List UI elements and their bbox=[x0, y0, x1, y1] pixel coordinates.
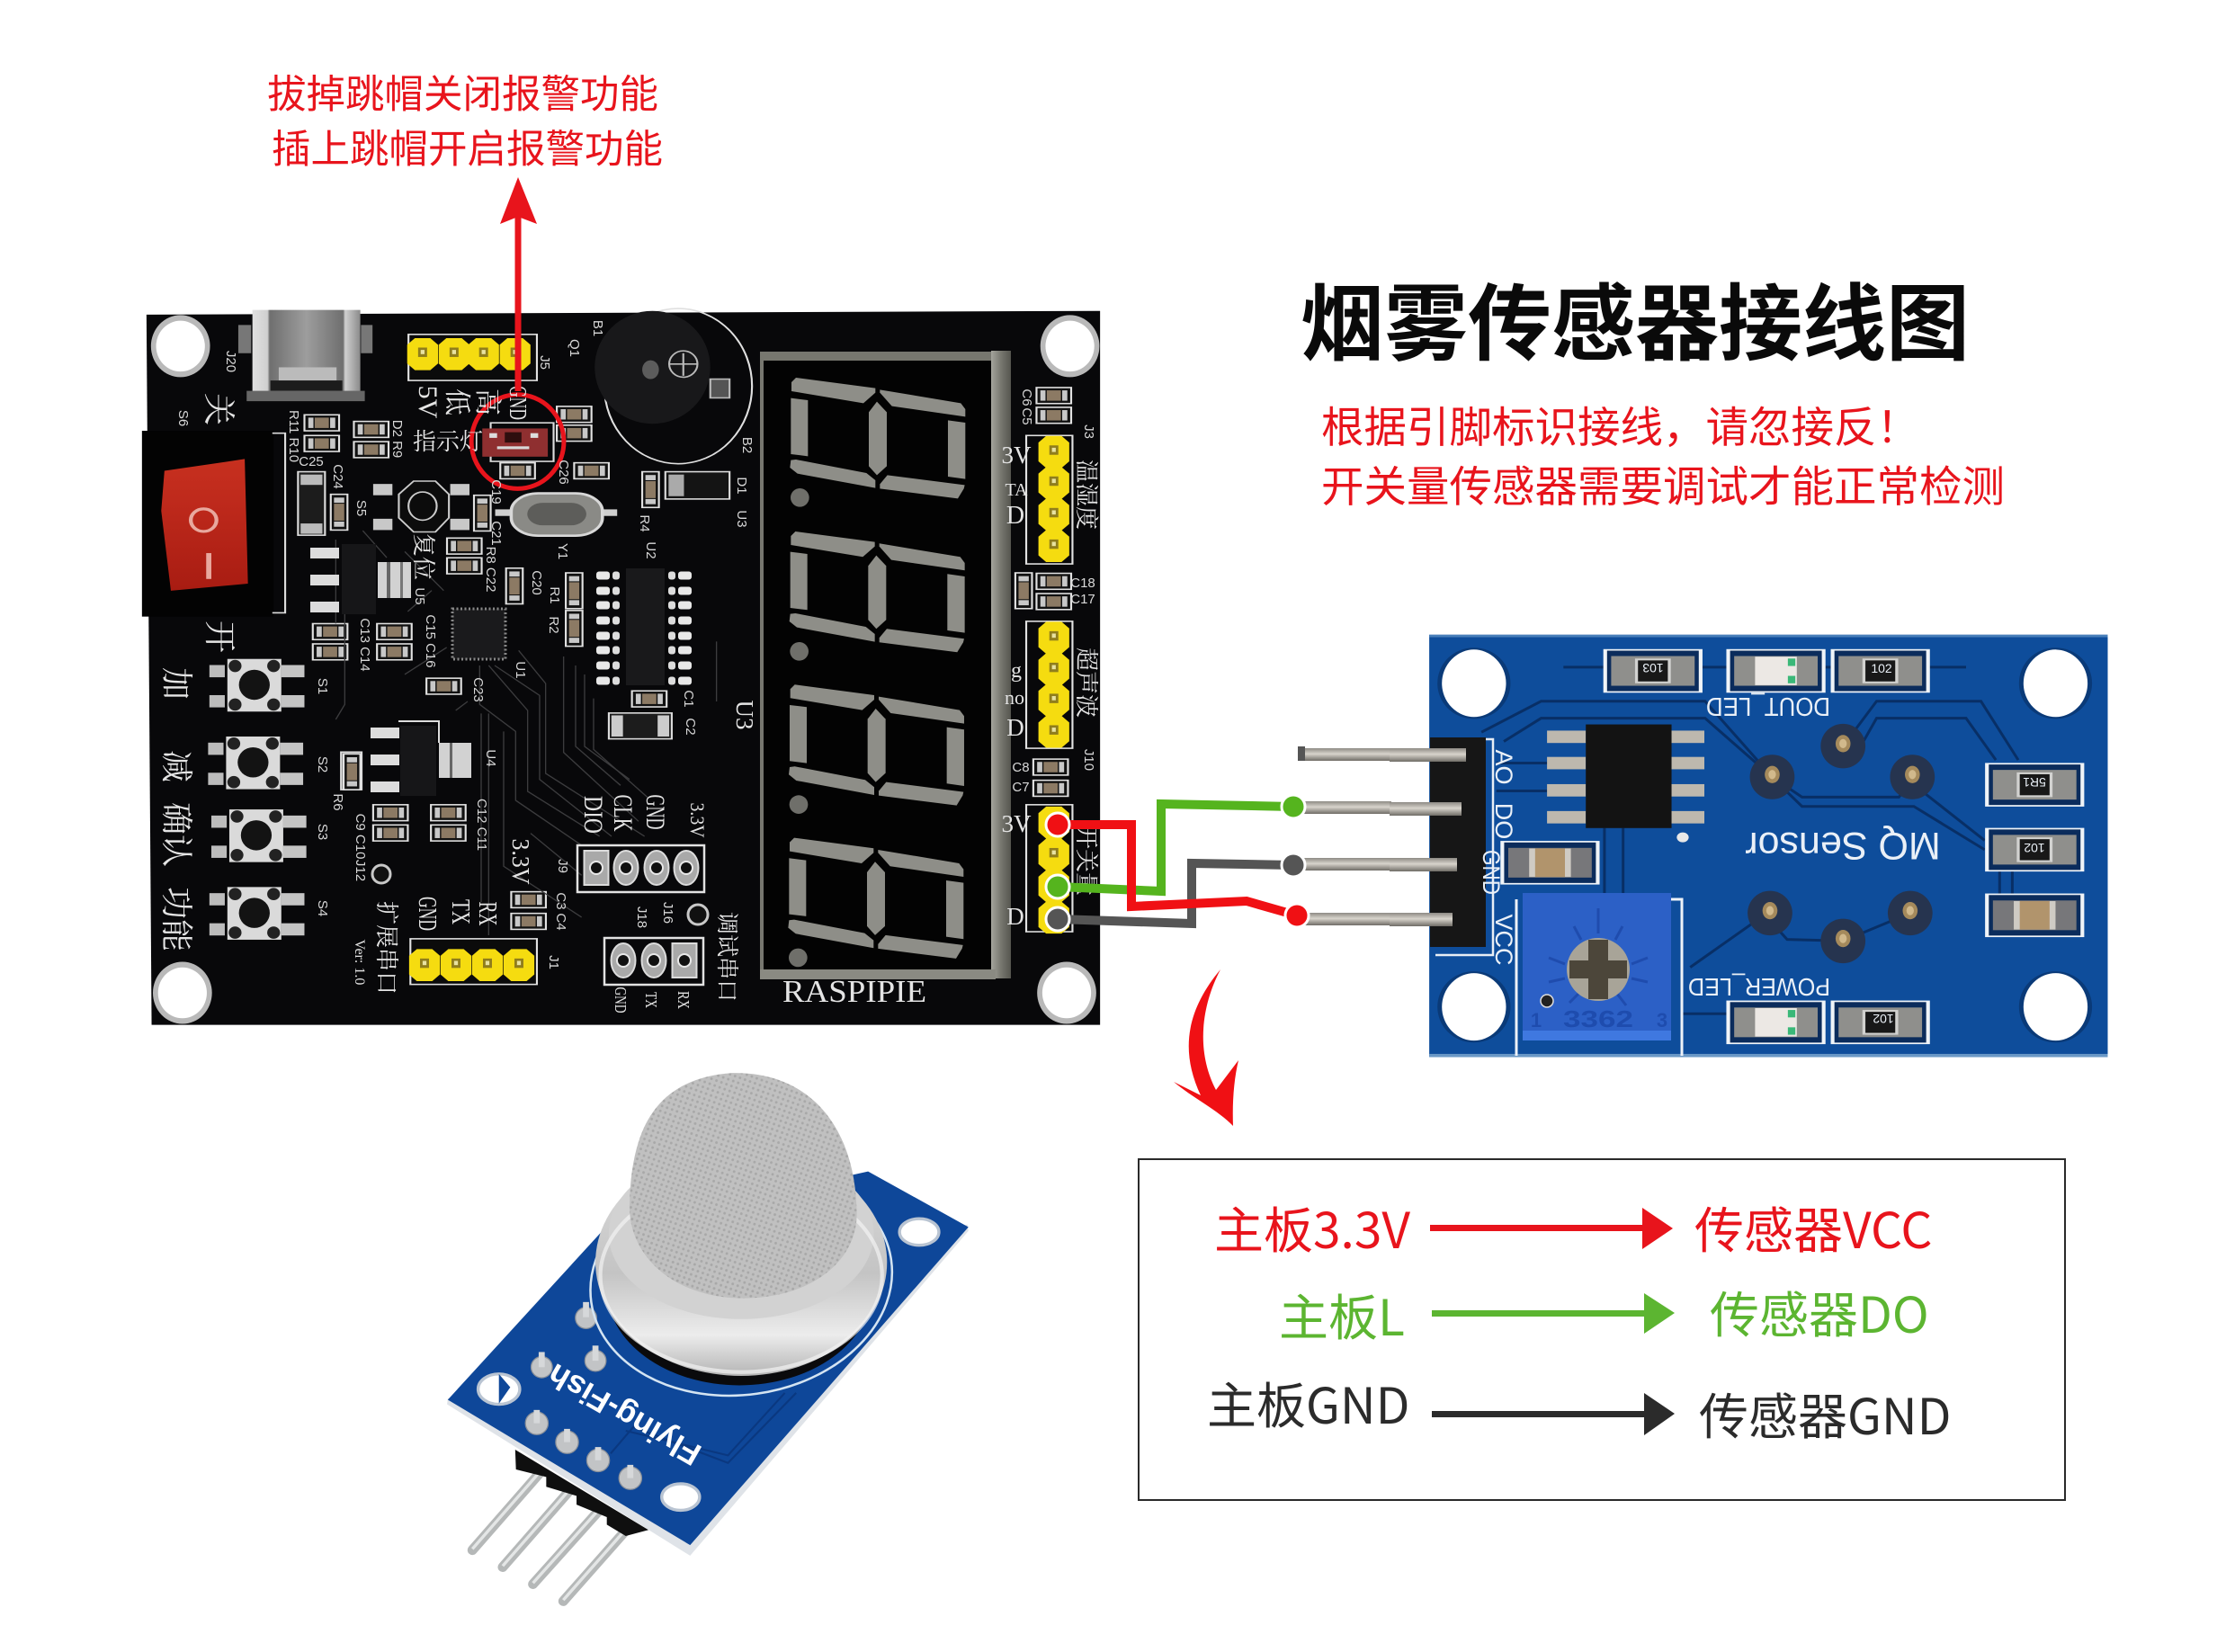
silkscreen labels: D bbox=[1006, 903, 1024, 930]
silkscreen labels: 扩展串口 bbox=[373, 901, 399, 995]
silkscreen labels: C7 bbox=[1012, 780, 1030, 795]
silkscreen labels: D2 R9 bbox=[389, 420, 405, 458]
row: GND to GND bbox=[1207, 1366, 1952, 1449]
silkscreen labels: RASPIPIE bbox=[782, 974, 926, 1009]
silkscreen labels: S1 bbox=[315, 678, 330, 694]
panel: MQ sensor board top view bbox=[1298, 635, 2108, 1057]
solder pads bbox=[525, 1308, 641, 1489]
silkscreen text on sensor board: VCC bbox=[1490, 914, 1517, 966]
header J5 bbox=[407, 335, 537, 380]
silkscreen labels: U4 bbox=[483, 749, 498, 767]
arrow: curved red down arrow bbox=[1174, 969, 1238, 1126]
heading: jumper note: 拔掉跳帽关闭报警功能 bbox=[267, 63, 658, 120]
silkscreen labels: 5V bbox=[413, 386, 443, 419]
silkscreen labels: C15 C16 bbox=[423, 614, 438, 668]
silkscreen labels: U5 bbox=[412, 587, 427, 605]
heading: jumper note: 插上跳帽开启报警功能 bbox=[272, 118, 663, 174]
silkscreen labels: J5 bbox=[537, 355, 552, 370]
blue trim potentiometer: 3 bbox=[1657, 1009, 1667, 1031]
row: GND to GND: 主板GND bbox=[1207, 1366, 1410, 1438]
silkscreen labels: 指示灯 bbox=[413, 429, 483, 455]
SMD resistors, LEDs and capacitors bbox=[1502, 650, 2082, 1043]
power rocker switch bbox=[142, 431, 285, 617]
text block: wiring warnings bbox=[1321, 393, 2005, 514]
heading: jumper note bbox=[267, 63, 663, 174]
main MCU U1 bbox=[452, 609, 505, 659]
tactile buttons bbox=[208, 659, 307, 940]
panel: MQ sensor module perspective photo bbox=[447, 1073, 969, 1601]
silkscreen labels: TX bbox=[446, 899, 474, 924]
silkscreen text on sensor board bbox=[1478, 661, 2046, 1026]
seven-segment digits bbox=[788, 378, 965, 967]
silkscreen labels: J16 bbox=[660, 902, 675, 924]
silkscreen labels: S6 bbox=[175, 410, 191, 426]
silkscreen labels: C23 bbox=[470, 677, 486, 702]
silkscreen labels: B2 bbox=[739, 437, 755, 453]
test pads J12 and J16 bbox=[372, 865, 708, 924]
silkscreen labels: U3 bbox=[734, 510, 749, 528]
silkscreen labels: g bbox=[1011, 659, 1022, 683]
silkscreen labels: 加 bbox=[158, 667, 194, 700]
SOP chip U2 bbox=[596, 568, 692, 685]
silkscreen labels: 3V bbox=[1002, 442, 1032, 469]
silkscreen labels: S4 bbox=[315, 900, 330, 916]
header J10 bbox=[1026, 621, 1072, 748]
silkscreen labels: R1 bbox=[547, 586, 562, 604]
silkscreen labels: R4 bbox=[637, 514, 652, 532]
mounting holes bbox=[1440, 648, 2090, 1041]
silkscreen labels: C9 C10 bbox=[353, 814, 368, 859]
silkscreen labels: Q1 bbox=[567, 339, 582, 357]
silkscreen labels: C25 bbox=[299, 454, 324, 469]
pad pin stubs bbox=[533, 1302, 633, 1478]
silkscreen labels: C17 bbox=[1070, 592, 1095, 607]
silkscreen labels: 调试串口 bbox=[714, 912, 739, 1002]
panel: wiring legend bbox=[1139, 1159, 2065, 1500]
silkscreen labels: 功能 bbox=[158, 887, 194, 951]
silkscreen labels: R11 R10 bbox=[286, 410, 301, 462]
row: L to DO: 主板L bbox=[1279, 1278, 1405, 1350]
silkscreen labels: S2 bbox=[315, 756, 330, 772]
silkscreen text on sensor board: 102 bbox=[1871, 661, 1892, 675]
arrow: jumper note up arrow bbox=[500, 177, 537, 391]
silkscreen labels: R8 C22 bbox=[483, 547, 498, 592]
wire end dots bbox=[1046, 795, 1309, 931]
silkscreen labels: 减 bbox=[158, 750, 194, 782]
row: 3.3V to VCC: 传感器VCC bbox=[1694, 1191, 1932, 1263]
silkscreen labels: D1 bbox=[734, 477, 749, 495]
silkscreen labels: 高 bbox=[472, 388, 502, 415]
wire: red VCC bbox=[1058, 825, 1297, 915]
silkscreen labels: DIO bbox=[578, 796, 608, 834]
usb-c connector bbox=[238, 310, 372, 401]
silkscreen labels: R6 bbox=[330, 793, 345, 811]
header pin tails bbox=[1298, 746, 1391, 925]
capacitors C25, C2 and diode D1 bbox=[298, 472, 729, 790]
silkscreen labels: 关 bbox=[201, 393, 237, 425]
silkscreen labels: J1 bbox=[546, 955, 561, 969]
header J7 bbox=[1026, 805, 1072, 933]
silkscreen labels: Y1 bbox=[555, 543, 570, 559]
silkscreen labels: C12 C11 bbox=[474, 799, 489, 851]
silkscreen labels: D bbox=[1006, 502, 1024, 530]
regulator U5 bbox=[310, 544, 411, 614]
silkscreen labels: no bbox=[1005, 686, 1024, 709]
pin header block and inner pins bbox=[1390, 737, 1493, 955]
row: L to DO: 传感器DO bbox=[1710, 1275, 1929, 1347]
silkscreen labels: U3 bbox=[731, 700, 758, 730]
through-hole header J18 bbox=[604, 938, 703, 985]
printed ring bbox=[576, 1147, 907, 1415]
silkscreen labels: GND bbox=[612, 987, 630, 1013]
silkscreen labels: C26 bbox=[556, 460, 571, 485]
silkscreen labels: C6 bbox=[1019, 388, 1034, 406]
silkscreen labels: TA bbox=[1005, 480, 1028, 500]
silkscreen labels: C1 bbox=[681, 690, 696, 708]
row: 3.3V to VCC: 主板3.3V bbox=[1214, 1191, 1410, 1263]
sensor board graphics bbox=[1429, 635, 2108, 1057]
header J3 bbox=[1026, 435, 1072, 564]
row: GND to GND: 传感器GND bbox=[1699, 1377, 1952, 1449]
regulator U4 bbox=[371, 721, 471, 796]
silkscreen labels: 复位 bbox=[410, 533, 436, 580]
mounting holes bbox=[478, 1219, 939, 1510]
silkscreen text on sensor board: 102 bbox=[2024, 841, 2045, 855]
through-hole header J9 bbox=[577, 845, 704, 892]
silkscreen labels: J10 bbox=[1081, 749, 1096, 771]
silkscreen labels: U2 bbox=[643, 541, 658, 559]
silkscreen labels: 温湿度 bbox=[1073, 460, 1099, 530]
silkscreen labels: C21 bbox=[488, 521, 504, 546]
silkscreen labels: C18 bbox=[1070, 576, 1095, 591]
silkscreen labels: TX bbox=[642, 992, 660, 1008]
silkscreen labels: J18 bbox=[634, 906, 649, 928]
header and pins bbox=[472, 1450, 648, 1601]
board base and parts bbox=[142, 308, 1100, 1025]
silkscreen text on sensor board: MQ Sensor bbox=[1745, 824, 1941, 867]
silkscreen labels: S5 bbox=[353, 500, 369, 516]
silkscreen labels: 开关量 bbox=[1073, 826, 1099, 896]
silkscreen labels: 超声波 bbox=[1073, 647, 1099, 718]
seven-segment display frame bbox=[760, 351, 1011, 979]
silkscreen labels: 低 bbox=[442, 388, 471, 415]
silkscreen text on sensor board: POWER_LED bbox=[1688, 973, 1830, 1001]
silkscreen labels bbox=[158, 320, 1099, 1013]
silkscreen labels: 3.3V bbox=[686, 802, 709, 838]
buzzer bbox=[594, 308, 752, 464]
PCB traces bbox=[335, 531, 717, 935]
row: L to DO bbox=[1279, 1275, 1929, 1350]
wire: grey GND bbox=[1058, 863, 1293, 924]
silkscreen labels: GND bbox=[413, 897, 441, 931]
silkscreen labels: C19 bbox=[488, 479, 504, 505]
silkscreen text on sensor board: 102 bbox=[1873, 1012, 1894, 1026]
silkscreen labels: C24 bbox=[330, 464, 345, 489]
silkscreen labels: GND bbox=[640, 795, 670, 829]
silkscreen text on sensor board: DO bbox=[1490, 803, 1517, 839]
sensor can bbox=[607, 1192, 872, 1385]
silkscreen labels: B1 bbox=[590, 320, 605, 336]
silkscreen labels: RX bbox=[675, 991, 693, 1009]
PCB bbox=[447, 1225, 969, 1556]
silkscreen labels: 3V bbox=[1002, 810, 1032, 837]
silkscreen labels: U1 bbox=[513, 661, 528, 679]
silkscreen labels: 开 bbox=[201, 621, 237, 653]
silkscreen text on sensor board: 103 bbox=[1642, 661, 1664, 675]
wire: green DO bbox=[1058, 804, 1293, 891]
silkscreen labels: S3 bbox=[315, 824, 330, 840]
blue trim potentiometer bbox=[1516, 893, 1682, 1056]
silkscreen labels: C8 bbox=[1012, 760, 1030, 775]
text block: wiring warnings: 开关量传感器需要调试才能正常检测 bbox=[1321, 452, 2005, 514]
silkscreen text on sensor board: GND bbox=[1478, 850, 1505, 895]
title: 烟雾传感器接线图 bbox=[1301, 256, 1970, 378]
silkscreen labels: 确认 bbox=[158, 802, 194, 867]
panel: main control board bbox=[142, 308, 1100, 1025]
silkscreen labels: CLK bbox=[608, 795, 638, 832]
silkscreen labels: J12 bbox=[353, 860, 368, 881]
comparator chip bbox=[1547, 725, 1704, 843]
blue trim potentiometer: 1 bbox=[1531, 1009, 1542, 1031]
silkscreen labels: Ver: 1.0 bbox=[352, 940, 367, 985]
silkscreen labels: J3 bbox=[1081, 424, 1096, 439]
silkscreen labels: RX bbox=[473, 901, 501, 926]
reset button bbox=[373, 481, 469, 532]
row: 3.3V to VCC bbox=[1214, 1191, 1932, 1263]
silkscreen labels: C3 bbox=[553, 892, 568, 910]
silkscreen labels: R2 bbox=[546, 616, 561, 634]
silkscreen labels: C20 bbox=[529, 570, 544, 595]
silkscreen text on sensor board: AO bbox=[1490, 749, 1517, 785]
silkscreen labels: C2 bbox=[683, 718, 698, 736]
silkscreen labels: C13 C14 bbox=[357, 618, 372, 672]
small SMD parts bbox=[304, 388, 1071, 929]
text block: wiring warnings: 根据引脚标识接线，请忽接反！ bbox=[1321, 393, 1919, 455]
brand text: Flying-Fish bbox=[541, 1356, 707, 1472]
mesh dome bbox=[630, 1073, 857, 1299]
blue trim potentiometer: 3362 bbox=[1563, 1005, 1633, 1032]
silkscreen labels: GND bbox=[505, 386, 532, 420]
silkscreen labels: D bbox=[1006, 714, 1024, 741]
silkscreen labels: J20 bbox=[223, 351, 238, 372]
legend frame bbox=[1139, 1159, 2065, 1500]
silkscreen labels: J9 bbox=[555, 859, 570, 873]
header J1 bbox=[409, 939, 537, 985]
silkscreen labels: C5 bbox=[1019, 407, 1034, 425]
silkscreen text on sensor board: DOUT_LED bbox=[1706, 692, 1830, 720]
red highlight circle bbox=[471, 395, 564, 488]
crystal bbox=[496, 494, 617, 536]
alarm jumper cap bbox=[482, 423, 554, 461]
solder joints bbox=[1748, 724, 1935, 963]
silkscreen labels: C4 bbox=[553, 913, 568, 931]
silkscreen labels: 3.3V bbox=[507, 838, 534, 885]
silkscreen text on sensor board: 5R1 bbox=[2023, 775, 2046, 790]
